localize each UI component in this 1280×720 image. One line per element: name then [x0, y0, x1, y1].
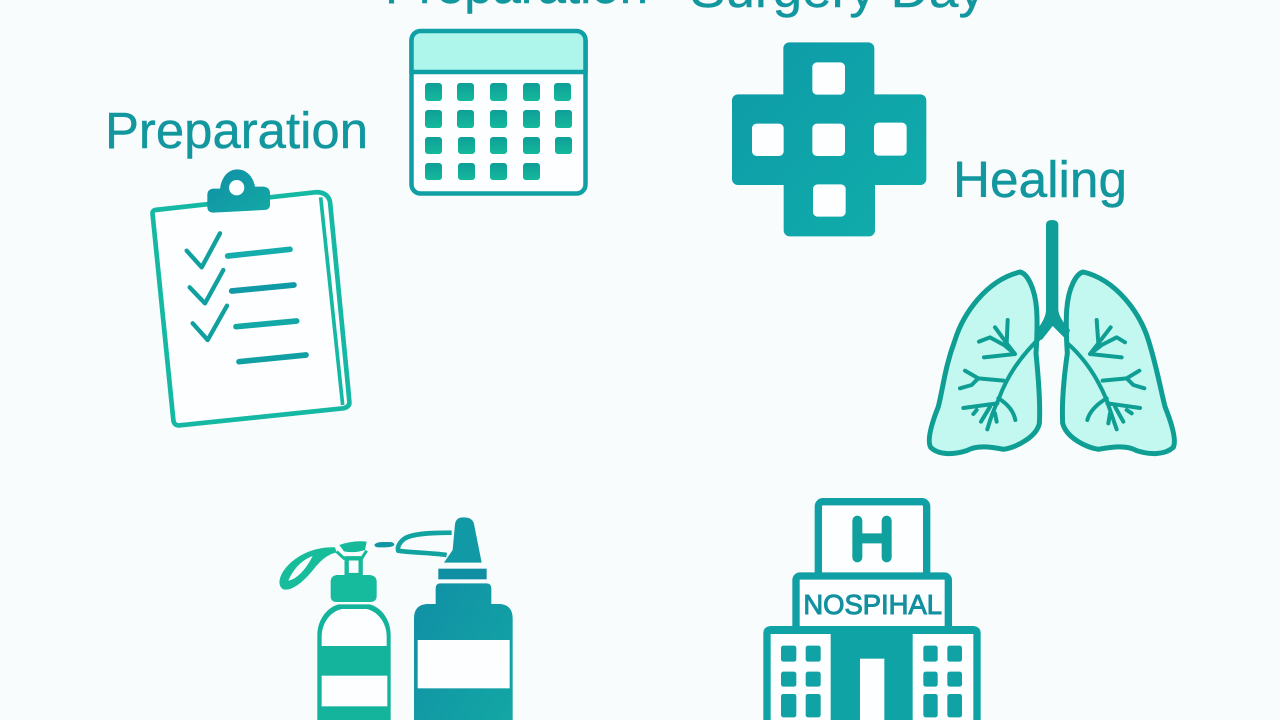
pump bottle [279, 541, 391, 720]
icon: hospital building [763, 502, 981, 720]
icon: clipboard checklist [153, 169, 349, 425]
sign text: NOSPIHAL [803, 589, 942, 620]
heading: Healing: Healing [953, 151, 1127, 208]
icon: medical cross [732, 42, 926, 236]
dropper bottle [374, 517, 513, 720]
icon: calendar [412, 31, 586, 194]
icon: pump bottle and dropper bottle [279, 517, 513, 720]
heading: Preparation left: Preparation [105, 102, 368, 159]
icon: lungs [929, 220, 1174, 454]
